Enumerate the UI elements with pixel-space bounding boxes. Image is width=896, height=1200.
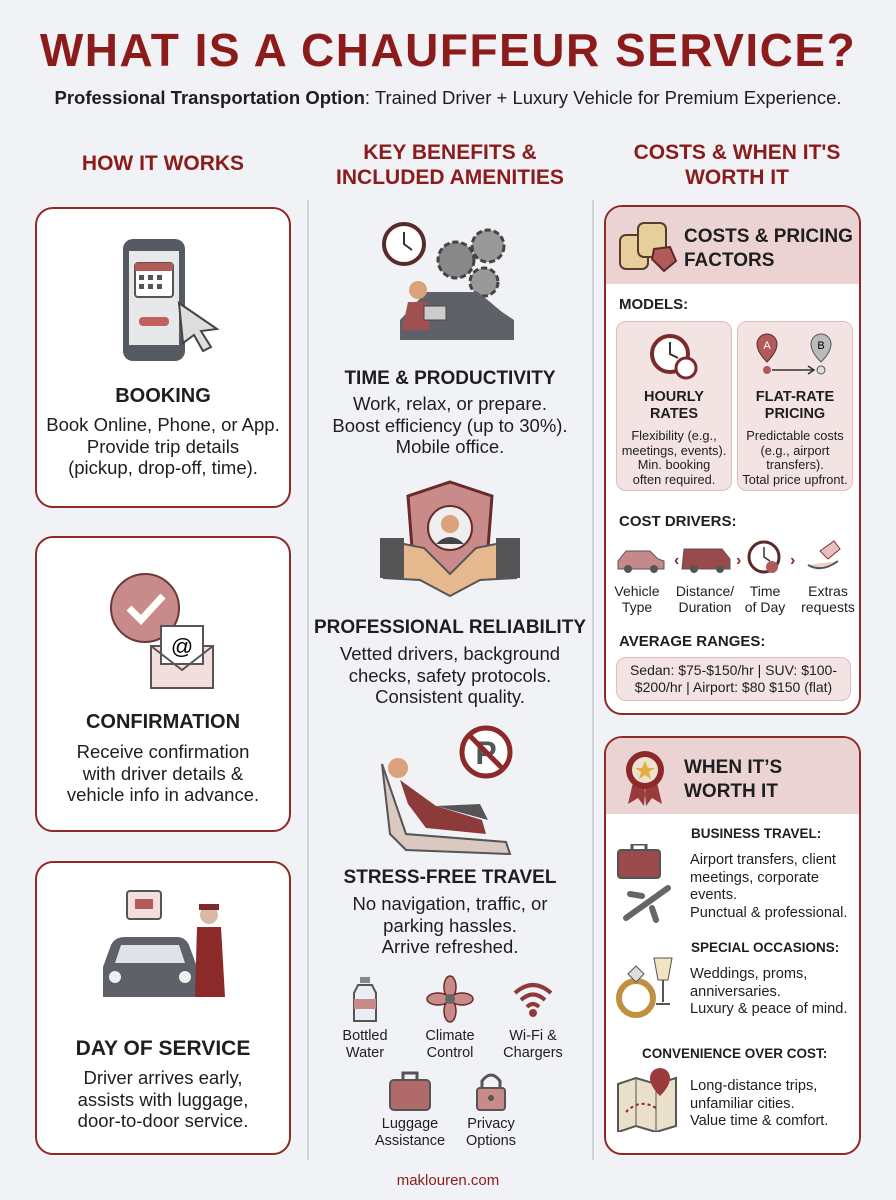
- amenity: wifi: Wi-Fi &: [509, 1028, 557, 1044]
- label: cost drivers: COST DRIVERS:: [619, 513, 737, 530]
- amenity: climate control: Climate: [425, 1028, 475, 1044]
- model: flat-rate: [737, 321, 853, 491]
- section: business travel: meetings, corporate: [690, 870, 819, 886]
- amenity: luggage: Assistance: [375, 1133, 445, 1149]
- amenity: climate control: Control: [427, 1045, 473, 1061]
- text: reliability: [340, 643, 560, 707]
- label: average ranges: AVERAGE RANGES:: [619, 633, 765, 650]
- text: reliability: checks, safety protocols.: [349, 664, 551, 686]
- text: reliability: Consistent quality.: [375, 686, 525, 707]
- icon: reclining seat no parking: P: [475, 735, 497, 771]
- icon: phone: [123, 239, 220, 361]
- heading: costs: FACTORS: [684, 250, 774, 271]
- icon: clock gears car: [382, 222, 514, 340]
- text: day of service: door-to-door service.: [78, 1110, 248, 1131]
- label: models: MODELS:: [619, 296, 688, 313]
- heading: day of service: DAY OF SERVICE: [76, 1037, 250, 1060]
- card: confirmation: [35, 536, 291, 832]
- amenities: [342, 975, 563, 1149]
- card: booking: [35, 207, 291, 508]
- section: convenience over cost: [617, 1046, 828, 1132]
- model: hourly: [616, 321, 732, 491]
- section: business travel: [617, 826, 847, 923]
- section: business travel: Airport transfers, client: [690, 852, 836, 868]
- section: convenience over cost: CONVENIENCE OVER COST:: [642, 1046, 827, 1061]
- model: flat-rate: FLAT-RATE: [756, 389, 834, 405]
- icon: reclining seat no parking: [381, 726, 512, 855]
- text: reliability: Vetted drivers, background: [340, 643, 560, 664]
- model: hourly: Flexibility (e.g.,: [631, 428, 717, 443]
- heading: reliability: PROFESSIONAL RELIABILITY: [314, 617, 586, 638]
- text: booking: Provide trip details: [87, 436, 239, 456]
- heading: worth it: WORTH IT: [684, 781, 778, 802]
- amenity: privacy: Privacy: [467, 1116, 515, 1132]
- ranges box: $200/hr | Airport: $80 $150 (flat): [635, 679, 832, 695]
- column heading: how it works: HOW IT WORKS: [82, 152, 244, 175]
- column heading: costs: [634, 141, 840, 189]
- header: costs: [606, 207, 859, 284]
- model: flat-rate: A: [763, 340, 771, 352]
- header: worth it: [606, 738, 859, 814]
- benefit: reliability: [314, 480, 586, 707]
- column heading: costs: WORTH IT: [685, 166, 789, 189]
- icon: car and driver: [103, 890, 225, 997]
- section: business travel: Punctual & professional.: [690, 904, 847, 920]
- model: flat-rate: Predictable costs: [746, 428, 844, 443]
- heading: booking: BOOKING: [115, 385, 211, 407]
- model: flat-rate: Total price upfront.: [742, 472, 848, 486]
- amenity: bottled water: Water: [346, 1045, 384, 1061]
- text: stress-free: parking hassles.: [383, 914, 517, 936]
- icon: medal: [626, 751, 664, 806]
- model: hourly: meetings, events).: [622, 442, 726, 458]
- card: when it's worth it: [604, 736, 861, 1155]
- title: WHAT IS A CHAUFFEUR SERVICE?: [40, 24, 856, 76]
- section: special occasions: SPECIAL OCCASIONS:: [691, 940, 839, 955]
- text: booking: [46, 414, 280, 478]
- amenity: bottled water: [342, 977, 388, 1061]
- cost drivers row: Duration: [679, 599, 731, 615]
- text: time: Mobile office.: [396, 436, 504, 457]
- text: booking: (pickup, drop-off, time).: [68, 457, 258, 478]
- icon: check envelope: [110, 573, 214, 689]
- text: time: Work, relax, or prepare.: [353, 393, 547, 414]
- section: convenience over cost: unfamiliar cities.: [690, 1096, 795, 1112]
- text: confirmation: vehicle info in advance.: [67, 784, 259, 805]
- text: day of service: assists with luggage,: [78, 1088, 248, 1110]
- model: flat-rate: B: [817, 340, 825, 352]
- heading: costs: [684, 226, 853, 271]
- footer: maklouren.com: [397, 1172, 499, 1189]
- cost drivers row: Type: [622, 599, 652, 615]
- section: convenience over cost: Value time & comfort.: [690, 1113, 828, 1129]
- cost drivers row: requests: [801, 599, 855, 615]
- heading: worth it: [684, 757, 782, 802]
- heading: costs: COSTS & PRICING: [684, 226, 853, 247]
- cost drivers row: [614, 540, 855, 615]
- icon: check envelope: @: [171, 634, 193, 659]
- heading: confirmation: CONFIRMATION: [86, 711, 240, 733]
- section: special occasions: Weddings, proms,: [690, 966, 807, 982]
- subtitle: Professional Transportation Option: Trained Driver + Luxury Vehicle for Premium Experience.: [54, 87, 842, 108]
- ranges box: Sedan: $75-$150/hr | SUV: $100-: [630, 662, 837, 678]
- text: booking: Book Online, Phone, or App.: [46, 414, 280, 435]
- cost drivers row: Vehicle: [614, 583, 660, 599]
- text: confirmation: with driver details &: [83, 762, 243, 784]
- card: costs & pricing: [604, 205, 861, 715]
- heading: stress-free: STRESS-FREE TRAVEL: [344, 867, 556, 888]
- column heading: key benefits: [336, 141, 564, 189]
- heading: time: TIME & PRODUCTIVITY: [344, 368, 556, 389]
- amenity: bottled water: Bottled: [342, 1028, 388, 1044]
- cost drivers row: ›: [736, 552, 741, 569]
- heading: worth it: WHEN IT’S: [684, 757, 782, 778]
- cost drivers row: of Day: [745, 599, 785, 615]
- section: convenience over cost: Long-distance trips,: [690, 1078, 817, 1094]
- text: day of service: [78, 1067, 248, 1131]
- benefit: stress-free: [344, 726, 556, 957]
- model: hourly: HOURLY: [644, 389, 704, 405]
- text: stress-free: No navigation, traffic, or: [352, 893, 548, 914]
- benefit: time & productivity: [332, 222, 568, 457]
- cost drivers row: Time: [750, 583, 780, 599]
- amenity: privacy: Options: [466, 1133, 516, 1149]
- amenity: wifi: [503, 982, 563, 1061]
- text: day of service: Driver arrives early,: [84, 1067, 242, 1088]
- model: hourly: often required.: [633, 472, 715, 486]
- text: confirmation: Receive confirmation: [77, 741, 249, 762]
- icon: coins: [619, 222, 678, 272]
- amenity: climate control: [425, 975, 475, 1061]
- cost drivers row: ›: [790, 552, 795, 569]
- ranges box: [616, 657, 851, 701]
- text: stress-free: Arrive refreshed.: [382, 936, 518, 957]
- amenity: luggage: Luggage: [382, 1116, 438, 1132]
- text: stress-free: [352, 893, 548, 957]
- section: special occasions: [616, 940, 847, 1018]
- text: confirmation: [67, 741, 259, 805]
- section: business travel: BUSINESS TRAVEL:: [691, 826, 821, 841]
- column heading: key benefits: INCLUDED AMENITIES: [336, 166, 564, 189]
- model: hourly: RATES: [650, 406, 698, 422]
- section: special occasions: Luxury & peace of mind.: [690, 1001, 847, 1017]
- column heading: costs: COSTS & WHEN IT'S: [634, 141, 840, 164]
- card: day of service: [35, 861, 291, 1155]
- model: flat-rate: (e.g., airport: [760, 442, 830, 458]
- cost drivers row: Extras: [808, 583, 848, 599]
- amenity: luggage: [375, 1072, 445, 1149]
- model: flat-rate: transfers).: [766, 457, 824, 472]
- text: time: Boost efficiency (up to 30%).: [332, 414, 568, 436]
- cost drivers row: ‹: [674, 552, 679, 569]
- section: business travel: events.: [690, 887, 737, 903]
- column heading: key benefits: KEY BENEFITS &: [363, 141, 537, 164]
- model: flat-rate: PRICING: [765, 406, 825, 422]
- amenity: privacy: [466, 1074, 516, 1149]
- section: special occasions: anniversaries.: [690, 984, 781, 1000]
- text: time: [332, 393, 568, 457]
- icon: shield handshake: [380, 480, 520, 598]
- model: hourly: Min. booking: [638, 457, 710, 472]
- amenity: wifi: Chargers: [503, 1045, 563, 1061]
- cost drivers row: Distance/: [676, 583, 734, 599]
